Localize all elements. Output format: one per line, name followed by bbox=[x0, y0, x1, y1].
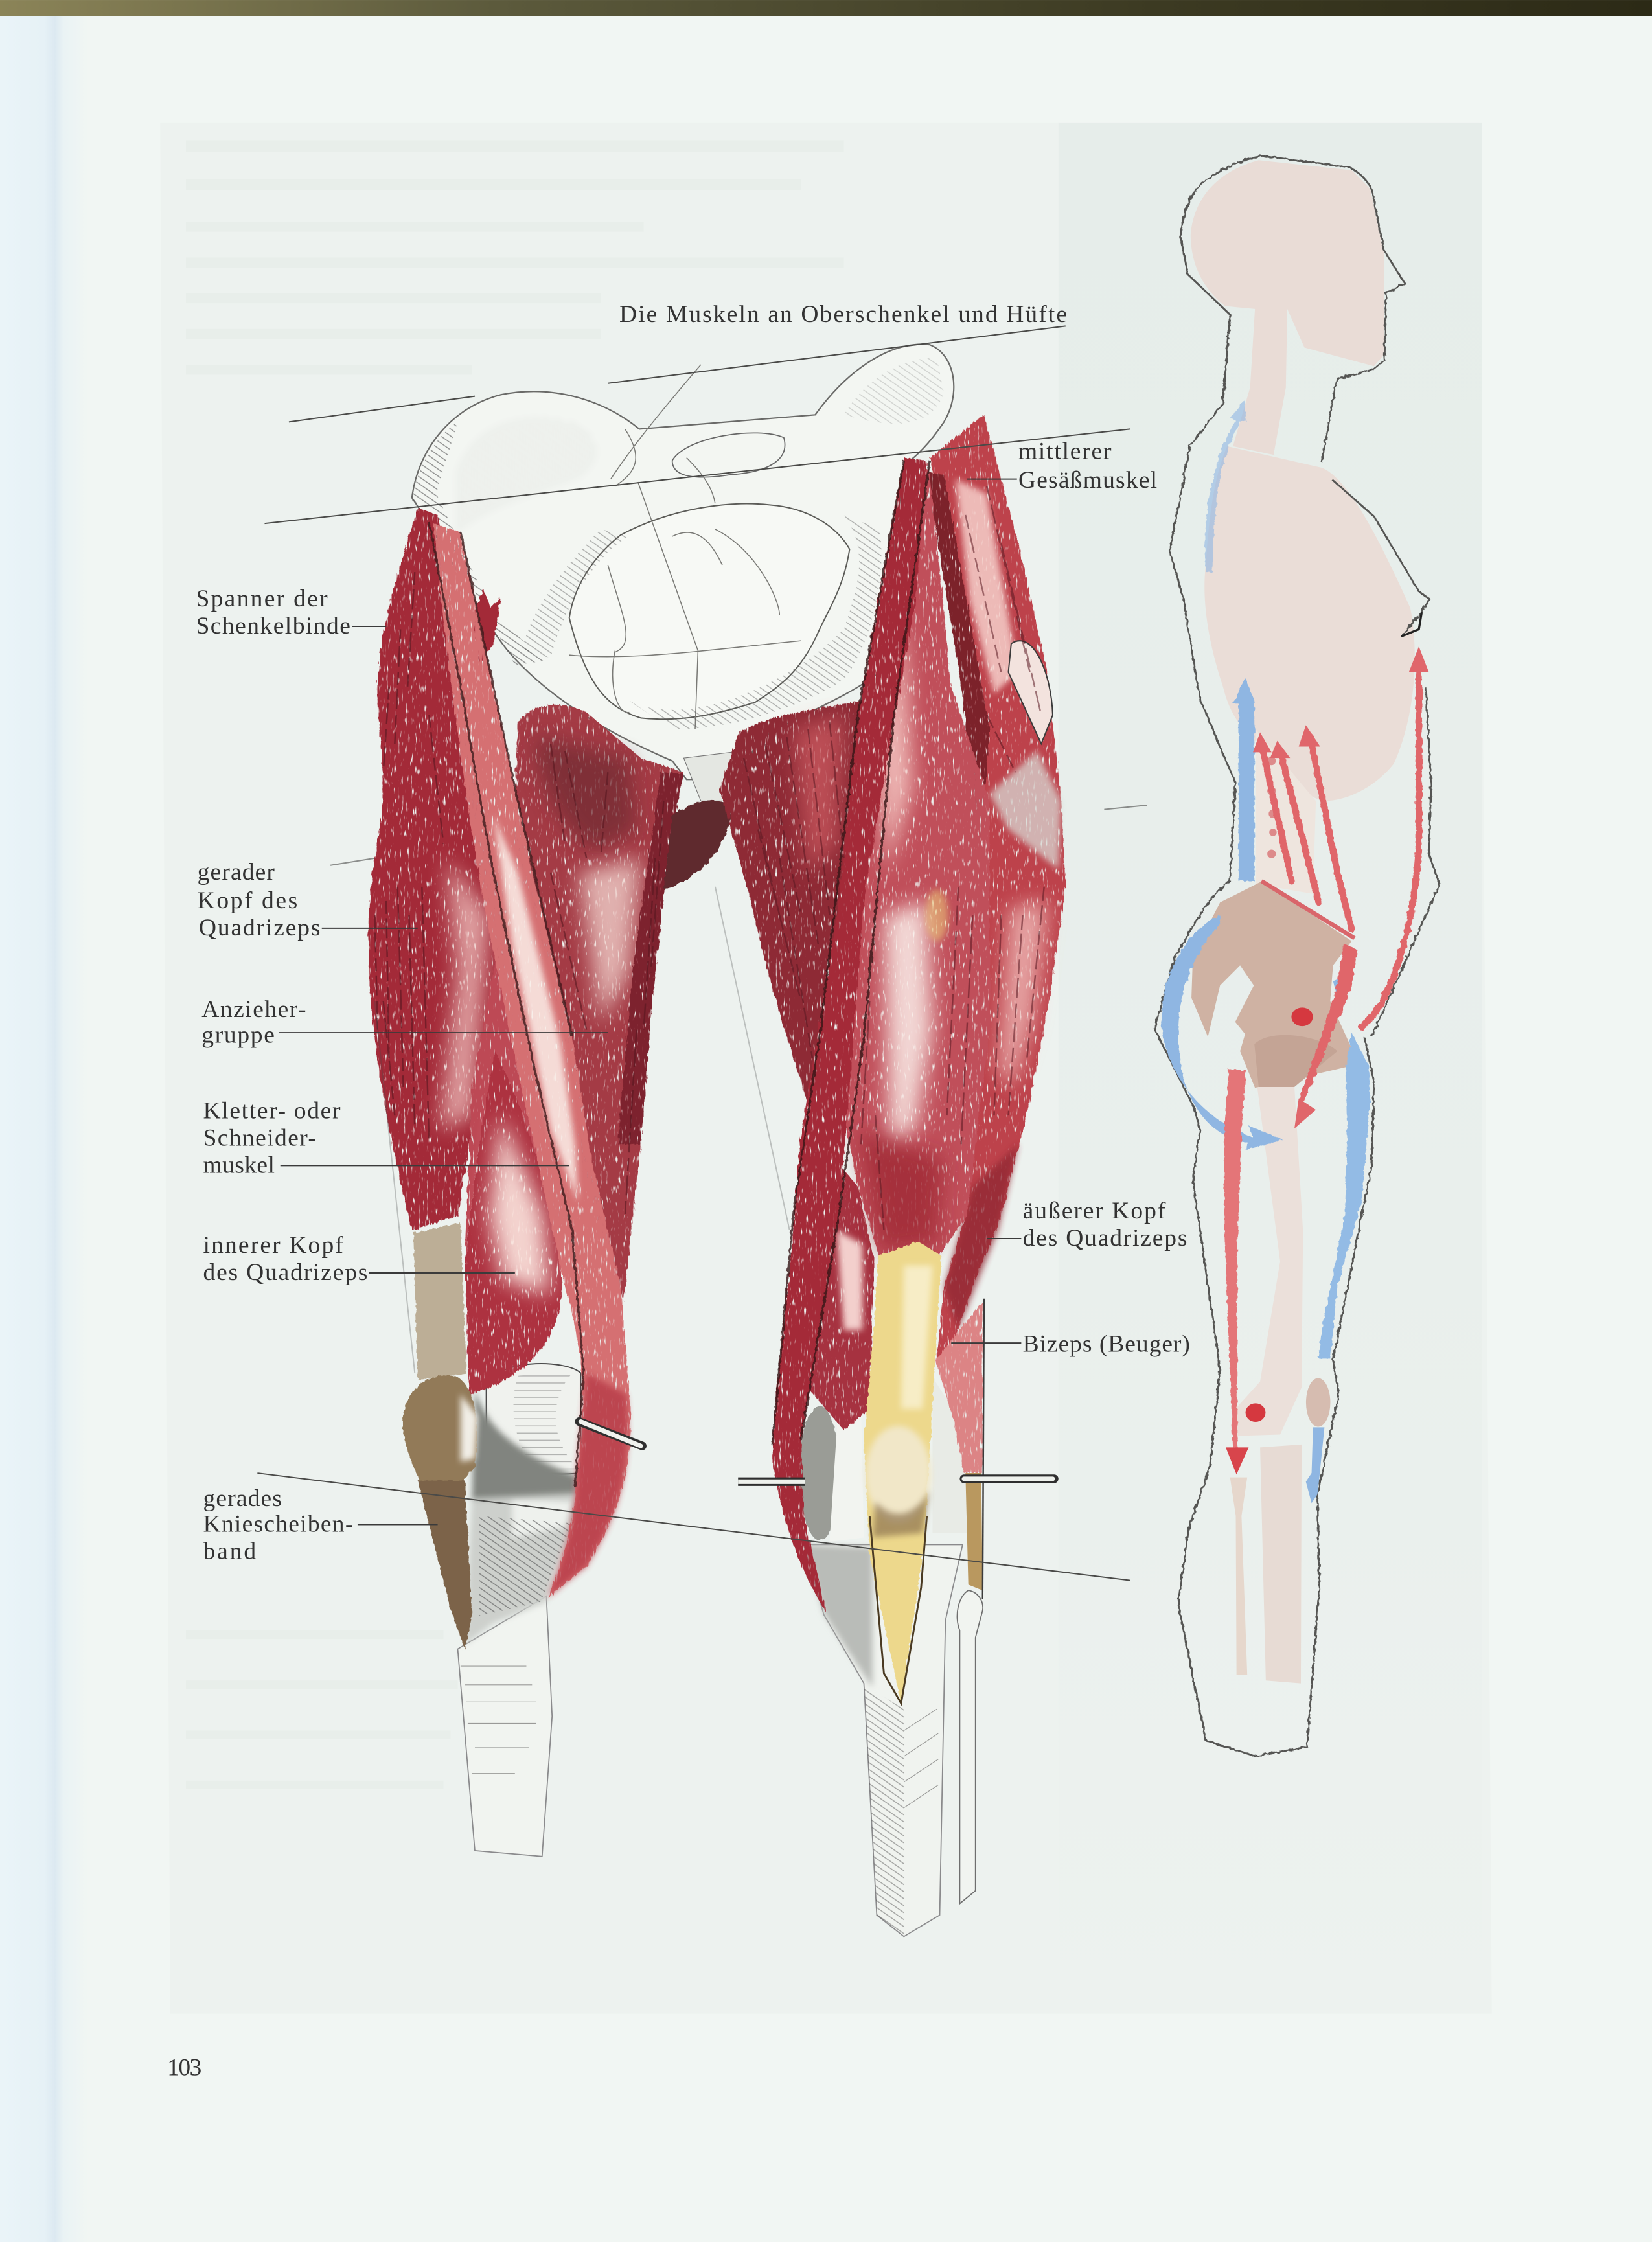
gluteus highlight bbox=[956, 479, 1018, 694]
yellow spot on rectus bbox=[925, 889, 948, 941]
label: innerer Kopf des Quadrizeps: des Quadrizeps bbox=[203, 1259, 367, 1286]
label: Kletter- oder Schneidermuskel: Schneider- bbox=[203, 1125, 316, 1151]
blue small stroke bbox=[1333, 977, 1348, 1003]
label: mittlerer Gesäßmuskel: Gesäßmuskel bbox=[1018, 467, 1157, 494]
sartorius dark outlines bbox=[429, 522, 584, 1487]
left tibia hatching bbox=[479, 1516, 572, 1616]
left ilium shading bbox=[455, 417, 597, 536]
right condyle white bbox=[830, 1409, 864, 1542]
left tibia highlight bbox=[512, 1499, 572, 1537]
label: innerer Kopf des Quadrizeps: innerer Kopf bbox=[203, 1232, 343, 1259]
pubic symphysis bbox=[683, 751, 744, 801]
left quadriceps tendon bbox=[413, 1223, 466, 1380]
left patella bbox=[403, 1375, 477, 1487]
right biceps bbox=[935, 1301, 983, 1473]
right rectus bbox=[844, 469, 990, 1259]
label: Anzieher-gruppe: gruppe bbox=[201, 1022, 275, 1049]
pencil construction lines bbox=[257, 326, 1147, 1581]
vastus medialis highlight bbox=[489, 1115, 549, 1294]
figure outline bbox=[1154, 156, 1440, 1756]
right pin outer bbox=[964, 1477, 1054, 1481]
outer lower dark bbox=[944, 1144, 1018, 1330]
red arrowheads bbox=[1253, 646, 1429, 758]
label: äußerer Kopf des Quadrizeps bbox=[987, 1198, 1187, 1252]
right thigh fibre strokes bbox=[744, 486, 1044, 1230]
side figure bbox=[1154, 156, 1440, 1756]
blue hip arrow bbox=[1162, 915, 1283, 1150]
label: äußerer Kopf des Quadrizeps: äußerer Kopf bbox=[1023, 1198, 1166, 1224]
label: Spanner der Schenkelbinde bbox=[196, 586, 386, 639]
right adductor bbox=[720, 701, 860, 1137]
label: gerader Kopf des Quadrizeps: Kopf des bbox=[198, 887, 297, 914]
head fill bbox=[1191, 160, 1384, 455]
rib cage fill bbox=[1204, 446, 1415, 801]
right yellow quadriceps tendon bbox=[864, 1241, 941, 1704]
right patella bbox=[866, 1426, 931, 1523]
page number: 103 bbox=[167, 2055, 201, 2081]
tendon outline bbox=[869, 1516, 927, 1704]
illustration panel bbox=[160, 123, 1492, 2014]
red front thigh arrow bbox=[1224, 1070, 1248, 1474]
label: äußerer Kopf des Quadrizeps: des Quadrizeps bbox=[1023, 1225, 1187, 1252]
red flame muscle near pelvis bbox=[472, 589, 501, 663]
gray wedge under condyle bbox=[472, 1390, 577, 1499]
right pin inner bbox=[738, 1480, 805, 1483]
left pin bbox=[579, 1422, 642, 1446]
sartorius highlight bbox=[494, 815, 578, 1202]
right outer muscles bbox=[930, 415, 1066, 1358]
title: Die Muskeln an Oberschenkel und Hüfte bbox=[619, 301, 1067, 328]
right sartorius bbox=[772, 458, 927, 1613]
sacrum outline bbox=[672, 433, 785, 477]
red pelvis crest bbox=[1261, 881, 1355, 938]
lumbar spine fill bbox=[1256, 729, 1316, 894]
label: mittlerer Gesäßmuskel: mittlerer bbox=[1018, 439, 1112, 465]
label: Kletter- oder Schneidermuskel bbox=[203, 1098, 569, 1178]
label: Anzieher-gruppe: Anzieher- bbox=[201, 996, 306, 1023]
blue lower leg arrow bbox=[1306, 1427, 1324, 1503]
tensor dark band bbox=[927, 472, 990, 844]
inner pelvic opening bbox=[569, 504, 849, 719]
label: gerades Kniescheibenband: gerades bbox=[203, 1485, 282, 1512]
left vastus medialis bbox=[465, 1051, 562, 1395]
right condyle outer bbox=[932, 1377, 967, 1533]
right femoral condyle gray bbox=[799, 1406, 840, 1540]
right ilium shading bbox=[844, 358, 944, 424]
right bulge bbox=[1008, 641, 1053, 744]
left leg bbox=[369, 508, 683, 1857]
left book gutter bbox=[0, 0, 89, 2242]
label: gerader Kopf des Quadrizeps: gerader bbox=[198, 859, 275, 886]
patella highlight bbox=[461, 1395, 477, 1461]
right lower-leg shaft bbox=[804, 1544, 963, 1936]
label: Kletter- oder Schneidermuskel: muskel bbox=[203, 1152, 275, 1178]
label: gerader Kopf des Quadrizeps bbox=[198, 859, 418, 941]
left adductor group bbox=[512, 705, 683, 1301]
left patellar ligament bbox=[418, 1480, 472, 1649]
label: gerades Kniescheibenband bbox=[203, 1485, 438, 1565]
biceps outer line bbox=[983, 1299, 984, 1599]
left lateral muscle bbox=[369, 508, 508, 1230]
faint show-through text bbox=[186, 140, 844, 1789]
condyle hatching bbox=[514, 1370, 579, 1473]
label: Kletter- oder Schneidermuskel: Kletter- oder bbox=[203, 1098, 341, 1125]
right figure panel tint bbox=[1059, 123, 1482, 2011]
pelvic rim hatching bbox=[522, 515, 882, 729]
blue thigh arrow bbox=[1319, 1033, 1370, 1358]
adductor dark strap bbox=[618, 772, 683, 1144]
left rectus mass bbox=[465, 930, 565, 1287]
rectus lower red bbox=[858, 1130, 944, 1252]
right vastus medialis bbox=[801, 1144, 874, 1430]
label: gerades Kniescheibenband: Kniescheiben- bbox=[203, 1511, 353, 1538]
rectus upper pale bbox=[875, 615, 913, 873]
biceps tan tendon bbox=[965, 1473, 983, 1590]
red spine dots bbox=[1267, 757, 1278, 858]
pelvis bbox=[412, 345, 954, 801]
label: Bizeps (Beuger): Bizeps (Beuger) bbox=[1023, 1331, 1190, 1357]
blue back arrow upper (spine) bbox=[1205, 400, 1256, 881]
right fibula bbox=[957, 1590, 983, 1904]
label: gerades Kniescheibenband: band bbox=[203, 1539, 256, 1565]
rectus highlight bbox=[441, 858, 489, 1130]
femoral head bbox=[1254, 1035, 1337, 1087]
left femoral condyle bbox=[487, 1364, 580, 1474]
label: innerer Kopf des Quadrizeps bbox=[203, 1232, 515, 1286]
patella brown shade bbox=[873, 1491, 930, 1537]
pelvis body bbox=[412, 345, 954, 779]
left lower-leg shaft bbox=[457, 1596, 552, 1857]
nipple mark bbox=[1401, 612, 1422, 636]
right tibia shading bbox=[804, 1544, 873, 1687]
rectus pale streaks bbox=[884, 901, 932, 1144]
red hip joint bbox=[1291, 1007, 1313, 1026]
label: gerader Kopf des Quadrizeps: Quadrizeps bbox=[199, 915, 321, 941]
left tibia head shading bbox=[465, 1487, 579, 1645]
fibula bbox=[1230, 1478, 1247, 1675]
label: Anzieher-gruppe bbox=[201, 996, 608, 1049]
red knee joint bbox=[1246, 1403, 1265, 1422]
red diagonal arrow bbox=[1294, 944, 1357, 1128]
left thigh fibre strokes bbox=[374, 572, 663, 1216]
right adductor highlight bbox=[794, 715, 844, 873]
right fascia gray bbox=[990, 751, 1061, 869]
red arrows up to ribs bbox=[1261, 672, 1419, 1027]
femur bbox=[1233, 1087, 1303, 1436]
dark mass between thighs bbox=[663, 800, 732, 889]
label: mittlerer Gesäßmuskel bbox=[967, 439, 1157, 494]
top dark edge of the scanned page bbox=[0, 0, 1652, 16]
left sartorius bbox=[433, 523, 631, 1597]
adductor highlight bbox=[579, 858, 641, 1023]
sartorius lower red bbox=[548, 1373, 628, 1597]
label: Spanner der Schenkelbinde: Spanner der bbox=[196, 586, 328, 612]
left rim dark hatching bbox=[412, 422, 546, 665]
kneecap bbox=[1306, 1378, 1330, 1427]
tibia bbox=[1260, 1445, 1302, 1684]
pelvis centre lines bbox=[569, 365, 801, 729]
yellow tendon highlight bbox=[901, 1266, 932, 1409]
right vastus medialis highlight bbox=[837, 1230, 862, 1330]
adductor dark top bbox=[536, 737, 636, 851]
label: Spanner der Schenkelbinde: Schenkelbinde bbox=[196, 613, 350, 639]
pelvis side view bbox=[1191, 881, 1351, 1088]
right leg bbox=[720, 415, 1066, 1936]
lower outer highlight bbox=[998, 901, 1048, 1087]
sartorius right dark outlines bbox=[772, 461, 930, 1445]
